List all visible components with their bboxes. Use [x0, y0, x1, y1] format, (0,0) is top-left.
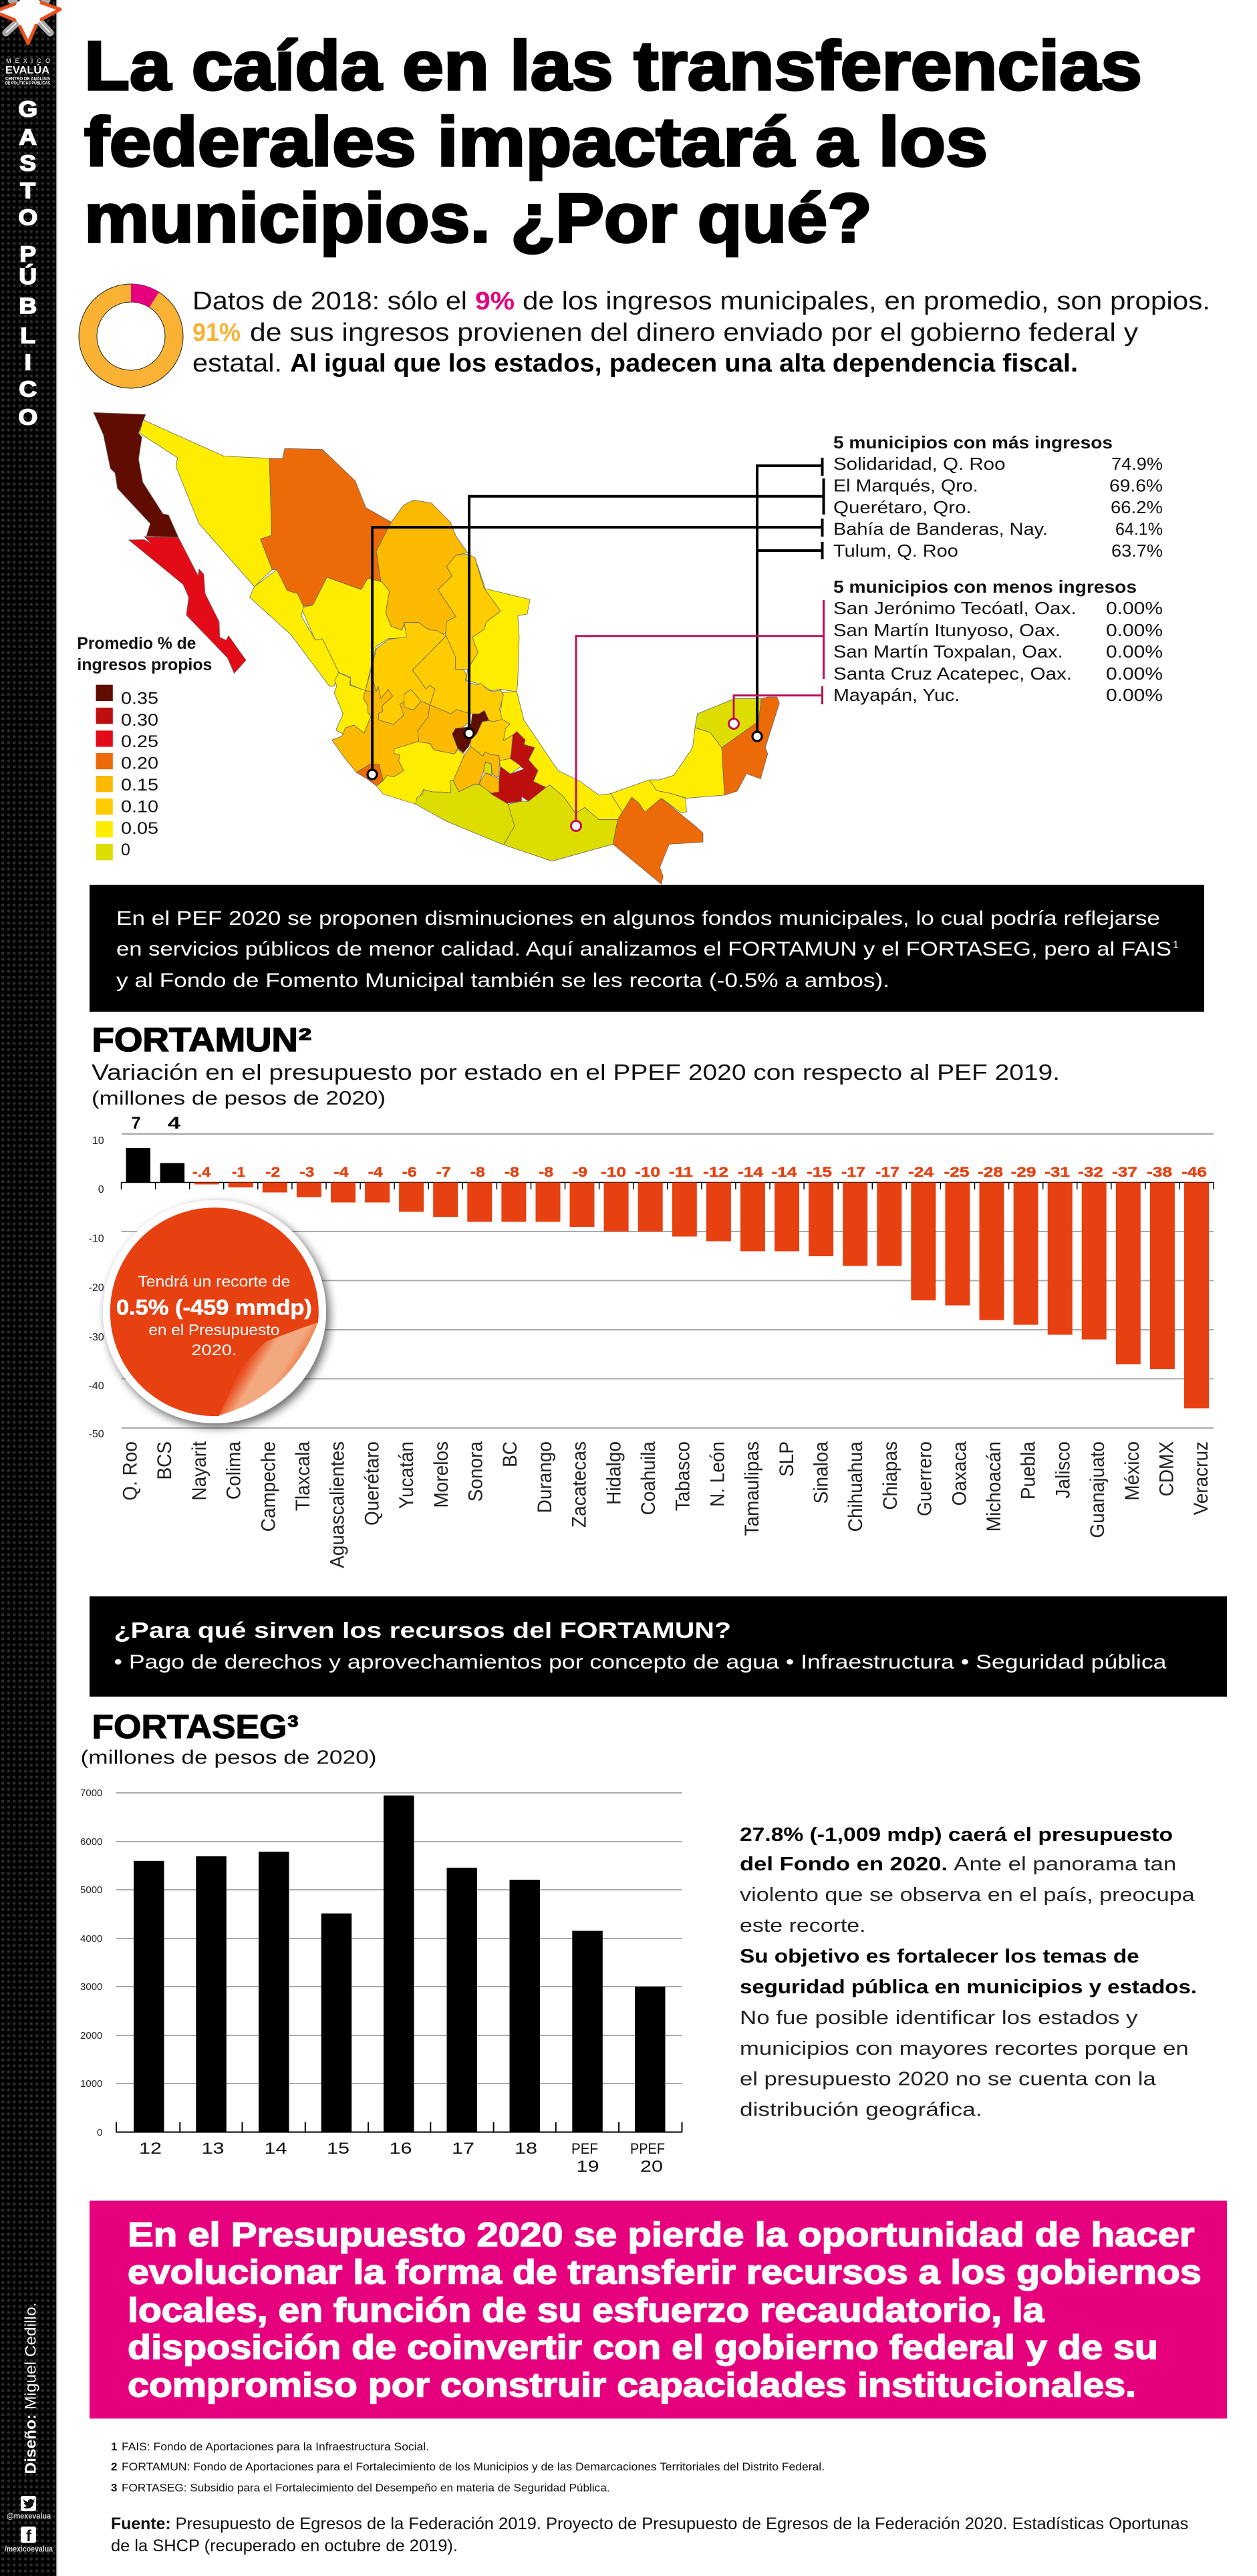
- y axis labels: 0: [98, 1184, 104, 1195]
- negative value labels: -37: [1112, 1165, 1137, 1180]
- text block: FORTASEG analysis: 27.8% (-1,009 mdp) caerá el presupuesto: [740, 1824, 1173, 1846]
- table: 5 municipios con más ingresos: 74.9%: [1111, 454, 1163, 474]
- state labels: Jalisco: [1053, 1441, 1075, 1499]
- x axis labels: 19: [576, 2158, 599, 2176]
- y axis labels: 1000: [80, 2078, 102, 2090]
- x axis labels: 12: [139, 2140, 162, 2158]
- y axis labels: 5000: [80, 1884, 102, 1896]
- section label: Gasto Público: P: [19, 242, 36, 267]
- section label: Gasto Público: L: [20, 323, 35, 348]
- state labels: Guerrero: [914, 1441, 936, 1516]
- text block: FORTASEG analysis: del Fondo en 2020.: [740, 1854, 948, 1875]
- bars: [134, 1796, 666, 2132]
- source: [111, 2515, 1188, 2555]
- state labels: Guanajuato: [1087, 1441, 1109, 1538]
- bar chart: FORTASEG budget: [80, 1787, 682, 2176]
- y axis labels: -50: [89, 1429, 104, 1440]
- callout: PEF 2020: [90, 885, 1204, 1012]
- callout: PEF 2020: y al Fondo de Fomento Municipal también se les recorta (-0.5% a ambos).: [116, 970, 889, 992]
- negative value labels: -15: [807, 1165, 832, 1180]
- negative value labels: -10: [635, 1165, 660, 1180]
- section label: Gasto Público: T: [20, 179, 36, 203]
- subtitle: FORTAMUN: Variación en el presupuesto por estado en el PPEF 2020 con respecto al PEF 2019.: [92, 1060, 1060, 1085]
- negative value labels: -12: [703, 1165, 728, 1180]
- subtitle: FORTASEG: (millones de pesos de 2020): [80, 1747, 377, 1769]
- state labels: Nayarit: [188, 1441, 211, 1501]
- negative value labels: -17: [841, 1165, 865, 1180]
- negative value labels: -.4: [192, 1165, 211, 1180]
- table: 5 municipios con más ingresos: El Marqués, Qro.: [833, 476, 978, 496]
- callout: para qué sirven los recursos: ¿Para qué sirven los recursos del FORTAMUN?: [114, 1618, 731, 1642]
- y axis labels: 0: [97, 2127, 102, 2138]
- negative value labels: -46: [1181, 1165, 1207, 1180]
- text block: FORTASEG analysis: violento que se observa en el país, preocupa: [740, 1884, 1196, 1906]
- state labels: [120, 1441, 1212, 1568]
- callout sticker: 0.5% cut: 0.5% (-459 mmdp): [116, 1296, 312, 1320]
- callout: conclusion: En el Presupuesto 2020 se pierde la oportunidad de hacer: [128, 2216, 1195, 2254]
- map legend: 0.30: [121, 711, 158, 730]
- footnotes: 2: [111, 2460, 117, 2473]
- state labels: Zacatecas: [569, 1441, 591, 1528]
- y axis labels: 4000: [80, 1933, 102, 1945]
- footnotes: [111, 2440, 825, 2494]
- section label: Gasto Público: [18, 98, 37, 430]
- logo text: CENTRO DE ANÁLISIS: [5, 76, 50, 82]
- state labels: Querétaro: [362, 1441, 384, 1526]
- map legend: 0.05: [121, 819, 158, 838]
- negative value labels: -14: [738, 1165, 763, 1180]
- state labels: Hidalgo: [603, 1441, 625, 1505]
- x axis labels: PPEF: [630, 2140, 665, 2157]
- map legend: 0.15: [121, 776, 158, 795]
- map of Mexico by state: [94, 412, 779, 884]
- negative value labels: -24: [908, 1165, 934, 1180]
- section label: Gasto Público: O: [18, 405, 37, 430]
- x axis labels: 17: [452, 2140, 474, 2158]
- table: 5 municipios con más ingresos: [833, 432, 1163, 561]
- callout: PEF 2020: En el PEF 2020 se proponen disminuciones en algunos fondos municipales, lo cual podría reflejarse: [116, 907, 1160, 929]
- state labels: Tabasco: [672, 1441, 694, 1511]
- negative value labels: -10: [601, 1165, 626, 1180]
- negative value labels: -2: [265, 1165, 280, 1180]
- callout sticker: 0.5% cut: Tendrá un recorte de: [138, 1273, 290, 1290]
- design credit: Diseño: Miguel Cedillo.: [21, 2303, 39, 2474]
- state labels: Coahuila: [638, 1441, 660, 1515]
- y axis labels: 2000: [80, 2030, 102, 2041]
- section label: Gasto Público: O: [18, 206, 37, 230]
- negative value labels: -4: [368, 1165, 383, 1180]
- callout: conclusion: compromiso por construir capacidades institucionales.: [128, 2366, 1136, 2404]
- section label: Gasto Público: Ú: [19, 264, 37, 289]
- icon: México Evalúa star logo: [0, 0, 61, 43]
- text block: FORTASEG analysis: el presupuesto 2020 no se cuenta con la: [740, 2069, 1157, 2090]
- footnotes: FORTASEG: Subsidio para el Fortalecimiento del Desempeño en materia de Seguridad Pública.: [122, 2482, 609, 2494]
- leader lines: lowest income municipalities: [571, 600, 823, 831]
- leader lines: top income municipalities: [368, 458, 823, 779]
- table: 5 municipios con menos ingresos: San Martín Itunyoso, Oax.: [833, 620, 1061, 640]
- bar chart: FORTAMUN variation by state: [89, 1114, 1214, 1568]
- intro text: 91%: [192, 319, 241, 347]
- callout: conclusion: [90, 2200, 1227, 2418]
- callout sticker: 0.5% cut: en el Presupuesto: [148, 1321, 279, 1338]
- text block: FORTASEG analysis: distribución geográfica.: [740, 2100, 982, 2121]
- intro text: [192, 287, 1210, 378]
- callout sticker: 0.5% cut: 2020.: [191, 1341, 237, 1358]
- callout: conclusion: disposición de coinvertir con el gobierno federal y de su: [128, 2328, 1158, 2366]
- table: 5 municipios con más ingresos: Bahía de Banderas, Nay.: [833, 519, 1048, 539]
- state labels: Michoacán: [983, 1441, 1005, 1532]
- zero axis and ticks: [122, 1183, 1214, 1189]
- table: 5 municipios con más ingresos: 63.7%: [1111, 541, 1163, 561]
- negative value labels: -8: [470, 1165, 485, 1180]
- x axis labels: [139, 2140, 665, 2176]
- state labels: Sinaloa: [811, 1441, 833, 1504]
- callout: conclusion: evolucionar la forma de transferir recursos a los gobiernos: [128, 2253, 1202, 2291]
- logo text: MÉXICO: [6, 57, 50, 64]
- text block: FORTASEG analysis: seguridad pública en municipios y estados.: [740, 1977, 1197, 1998]
- x axis labels: 16: [389, 2140, 412, 2158]
- title: La caída en las transferencias: [84, 27, 1142, 105]
- source: Fuente:: [111, 2515, 171, 2533]
- state labels: Chiapas: [879, 1441, 901, 1510]
- text block: FORTASEG analysis: municipios con mayores recortes porque en: [740, 2038, 1189, 2059]
- table: 5 municipios con más ingresos: 5 municipios con más ingresos: [833, 432, 1113, 452]
- subtitle: FORTAMUN: [92, 1060, 1060, 1109]
- state labels: BC: [499, 1441, 521, 1467]
- negative value labels: -25: [944, 1165, 970, 1180]
- negative value labels: [192, 1165, 1207, 1180]
- table: 5 municipios con más ingresos: Solidaridad, Q. Roo: [833, 454, 1005, 474]
- y axis labels: -30: [89, 1332, 104, 1343]
- table: 5 municipios con más ingresos: Querétaro, Qro.: [833, 497, 972, 517]
- negative value labels: -14: [771, 1165, 797, 1180]
- callout: para qué sirven los recursos: [90, 1596, 1227, 1697]
- text block: FORTASEG analysis: Ante el panorama tan: [954, 1854, 1176, 1875]
- footnotes: 3: [111, 2482, 117, 2494]
- negative value labels: -38: [1147, 1165, 1172, 1180]
- table: 5 municipios con menos ingresos: Mayapán, Yuc.: [833, 685, 960, 705]
- negative value labels: -6: [402, 1165, 417, 1180]
- callout: PEF 2020: 1: [1173, 940, 1179, 951]
- state labels: Sonora: [465, 1441, 487, 1501]
- icon: facebook: f: [26, 2527, 32, 2545]
- footnotes: FORTAMUN: Fondo de Aportaciones para el Fortalecimiento de los Municipios y de las Demarcaciones Territoriales del Distrito Federal.: [122, 2460, 825, 2473]
- intro text: estatal.: [192, 349, 282, 378]
- state labels: Oaxaca: [948, 1441, 971, 1506]
- chart: donut own vs federal income: [79, 284, 183, 388]
- callout: conclusion: locales, en función de su esfuerzo recaudatorio, la: [128, 2291, 1044, 2329]
- heading: FORTASEG: 3: [287, 1713, 298, 1731]
- map legend: 0.25: [121, 732, 158, 751]
- table: 5 municipios con menos ingresos: San Martín Toxpalan, Oax.: [833, 641, 1063, 662]
- negative value labels: -9: [573, 1165, 587, 1180]
- panel: sidebar: [0, 0, 61, 2576]
- x axis labels: 13: [202, 2140, 225, 2158]
- footnotes: FAIS: Fondo de Aportaciones para la Infraestructura Social.: [122, 2440, 429, 2453]
- negative value labels: -8: [539, 1165, 553, 1180]
- map legend: 0.35: [121, 690, 158, 708]
- table: 5 municipios con menos ingresos: 0.00%: [1106, 641, 1163, 662]
- table: 5 municipios con menos ingresos: 0.00%: [1106, 620, 1163, 640]
- positive value labels: 7: [132, 1114, 141, 1133]
- y axis labels: 10: [92, 1135, 104, 1147]
- state labels: Puebla: [1018, 1441, 1040, 1499]
- title: municipios. ¿Por qué?: [84, 180, 872, 257]
- northern, gulf and southern states: [94, 412, 779, 884]
- section label: Gasto Público: S: [19, 151, 36, 176]
- table: 5 municipios con menos ingresos: 5 municipios con menos ingresos: [833, 577, 1137, 597]
- y axis labels: [80, 1787, 102, 2138]
- map legend: [77, 634, 212, 860]
- negative value labels: -29: [1010, 1165, 1036, 1180]
- source: de la SHCP (recuperado en octubre de 2019).: [111, 2537, 458, 2555]
- negative value labels: -1: [232, 1165, 245, 1180]
- gridlines: [122, 1133, 1214, 1429]
- intro text: Datos de 2018: sólo el: [192, 287, 467, 315]
- state labels: SLP: [776, 1441, 798, 1477]
- x axis labels: 18: [515, 2140, 537, 2158]
- x axis labels: 14: [265, 2140, 287, 2158]
- negative value labels: -31: [1044, 1165, 1070, 1180]
- twitter handle: @mexevalua: [7, 2511, 51, 2521]
- intro text: Al igual que los estados, padecen una alta dependencia fiscal.: [290, 349, 1078, 378]
- section label: Gasto Público: G: [18, 98, 37, 122]
- legend title: ingresos propios: [77, 656, 212, 674]
- table: 5 municipios con más ingresos: 69.6%: [1109, 476, 1163, 496]
- text block: FORTASEG analysis: No fue posible identificar los estados y: [740, 2007, 1138, 2029]
- legend title: [77, 634, 212, 674]
- state labels: Tlaxcala: [292, 1441, 314, 1511]
- section label: Gasto Público: C: [19, 377, 37, 402]
- table: 5 municipios con más ingresos: 64.1%: [1115, 519, 1163, 539]
- text block: FORTASEG analysis: [740, 1824, 1197, 2121]
- state labels: Aguascalientes: [327, 1441, 349, 1568]
- negative bars: [194, 1183, 1209, 1409]
- baseline axis: [116, 2122, 682, 2132]
- y axis labels: 6000: [80, 1836, 102, 1848]
- section label: Gasto Público: I: [25, 350, 31, 375]
- negative value labels: -3: [299, 1165, 314, 1180]
- y axis labels: [89, 1135, 104, 1440]
- table: 5 municipios con menos ingresos: 0.00%: [1106, 685, 1163, 705]
- table: 5 municipios con menos ingresos: [833, 577, 1163, 705]
- title: [84, 27, 1142, 257]
- source: Presupuesto de Egresos de la Federación 2019. Proyecto de Presupuesto de Egresos de la Federación 2020. Estadísticas Oportunas: [175, 2515, 1188, 2533]
- negative value labels: -7: [436, 1165, 451, 1180]
- positive bars: [126, 1148, 184, 1183]
- table: 5 municipios con menos ingresos: San Jerónimo Tecóatl, Oax.: [833, 598, 1077, 618]
- heading: FORTAMUN: FORTAMUN: [92, 1021, 298, 1058]
- state labels: Campeche: [257, 1441, 280, 1532]
- state labels: BCS: [154, 1441, 176, 1480]
- title: federales impactará a los: [84, 104, 988, 181]
- positive value labels: [132, 1114, 180, 1133]
- intro text: 9%: [475, 287, 515, 315]
- y axis labels: -20: [89, 1282, 104, 1294]
- state labels: Colima: [223, 1441, 245, 1499]
- y axis labels: -40: [89, 1381, 104, 1392]
- intro text: de los ingresos municipales, en promedio, son propios.: [523, 287, 1210, 315]
- negative value labels: -11: [669, 1165, 693, 1180]
- state labels: CDMX: [1156, 1441, 1178, 1496]
- y axis labels: 3000: [80, 1981, 102, 1993]
- icon: facebook: [21, 2527, 36, 2545]
- intro text: de sus ingresos provienen del dinero enviado por el gobierno federal y: [250, 319, 1138, 347]
- table: 5 municipios con más ingresos: 66.2%: [1111, 497, 1163, 517]
- state labels: Durango: [534, 1441, 556, 1513]
- negative value labels: -28: [978, 1165, 1003, 1180]
- negative value labels: -4: [334, 1165, 349, 1180]
- x axis labels: PEF: [571, 2140, 598, 2157]
- negative value labels: -32: [1078, 1165, 1103, 1180]
- y axis labels: -10: [89, 1234, 104, 1245]
- table: 5 municipios con más ingresos: Tulum, Q. Roo: [833, 541, 958, 561]
- y axis labels: 7000: [80, 1787, 102, 1799]
- callout sticker: 0.5% cut: [103, 1200, 326, 1423]
- map legend: 0: [121, 841, 130, 859]
- callout: PEF 2020: en servicios públicos de menor calidad. Aquí analizamos el FORTAMUN y el FORTASEG, pero al FAIS: [116, 938, 1171, 960]
- x axis labels: 20: [640, 2158, 663, 2176]
- map legend: 0.20: [121, 754, 158, 772]
- state labels: Q. Roo: [120, 1441, 142, 1501]
- section label: Gasto Público: B: [19, 294, 37, 319]
- negative value labels: -8: [505, 1165, 519, 1180]
- state labels: Veracruz: [1190, 1441, 1212, 1515]
- gridlines: [116, 1792, 682, 2084]
- state labels: N. León: [707, 1441, 729, 1507]
- section label: Gasto Público: A: [19, 126, 37, 150]
- positive value labels: 4: [168, 1114, 180, 1133]
- text block: FORTASEG analysis: Su objetivo es fortalecer los temas de: [740, 1946, 1139, 1967]
- state labels: Yucatán: [396, 1441, 418, 1509]
- x axis labels: 15: [327, 2140, 350, 2158]
- callout: para qué sirven los recursos: • Pago de derechos y aprovechamientos por concepto de agua • Infraestructura • Seguridad pública: [114, 1651, 1167, 1673]
- logo text: [5, 57, 50, 86]
- negative value labels: -17: [875, 1165, 899, 1180]
- legend title: Promedio % de: [77, 634, 196, 653]
- text block: FORTASEG analysis: este recorte.: [740, 1915, 866, 1937]
- footnotes: 1: [111, 2440, 117, 2453]
- state labels: México: [1121, 1441, 1143, 1501]
- table: 5 municipios con menos ingresos: 0.00%: [1106, 664, 1163, 684]
- state labels: Tamaulipas: [741, 1441, 763, 1536]
- logo text: EVALÚA: [5, 63, 49, 76]
- subtitle: FORTAMUN: (millones de pesos de 2020): [92, 1088, 386, 1109]
- state labels: Chihuahua: [845, 1441, 867, 1532]
- facebook handle: /mexicoevalua: [5, 2545, 53, 2554]
- state labels: Morelos: [430, 1441, 452, 1508]
- table: 5 municipios con menos ingresos: Santa Cruz Acatepec, Oax.: [833, 664, 1072, 684]
- heading: FORTASEG: FORTASEG: [92, 1708, 287, 1745]
- table: 5 municipios con menos ingresos: 0.00%: [1106, 598, 1163, 618]
- heading: FORTAMUN: 2: [299, 1026, 311, 1044]
- icon: twitter: [21, 2496, 36, 2511]
- map legend: 0.10: [121, 798, 158, 817]
- central states: [332, 623, 521, 845]
- logo text: DE POLÍTICAS PÚBLICAS: [5, 80, 50, 86]
